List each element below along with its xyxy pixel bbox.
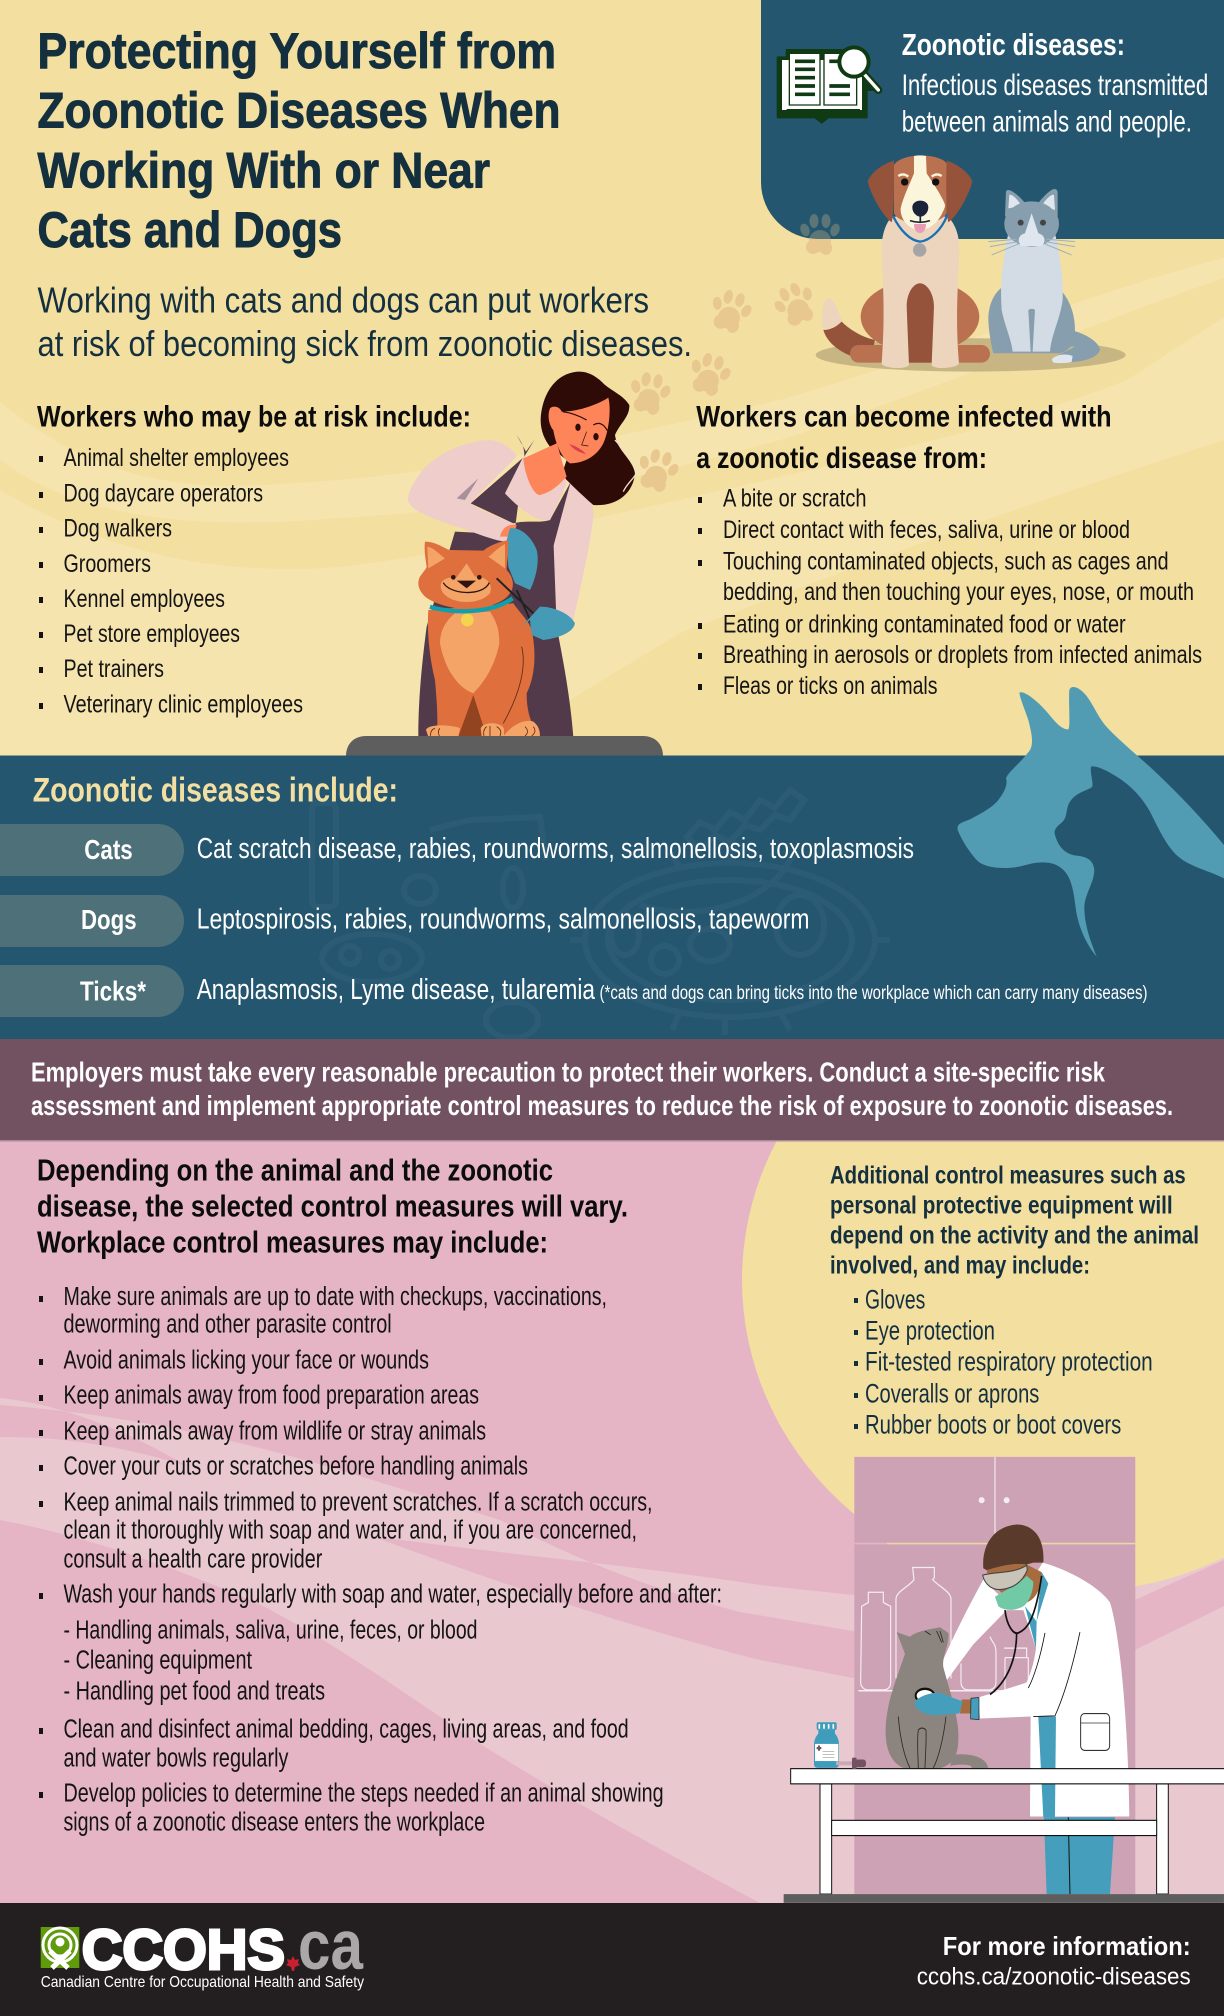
list: workplace control measures: Keep animal nails trimmed to prevent scratches. If a scratch occurs, <box>64 1489 652 1517</box>
list: infection routes: Direct contact with feces, saliva, urine or blood <box>723 516 1130 544</box>
list: protective equipment: Gloves <box>865 1284 925 1314</box>
heading: control measures: Workplace control measures may include: <box>37 1225 548 1260</box>
list: workers at risk <box>39 444 303 718</box>
cat on table <box>886 1627 988 1781</box>
title: Cats and Dogs <box>38 202 342 258</box>
heading: how workers become infected: a zoonotic disease from: <box>696 442 987 475</box>
footer <box>0 1903 1224 2016</box>
title <box>38 23 560 258</box>
list: workers at risk: Dog walkers <box>64 515 172 543</box>
list: workers at risk: Groomers <box>64 550 151 578</box>
heading: control measures: Depending on the animal and the zoonotic <box>37 1153 553 1188</box>
list: workplace control measures: - Handling pet food and treats <box>64 1677 325 1705</box>
row: cats: Cats <box>84 834 133 865</box>
dog <box>822 155 990 368</box>
list: workplace control measures: signs of a zoonotic disease enters the workplace <box>64 1809 485 1837</box>
list: workplace control measures: - Cleaning equipment <box>64 1646 252 1674</box>
subtitle <box>38 280 692 364</box>
dog being groomed <box>418 540 540 737</box>
heading: zoonotic diseases include: Zoonotic diseases include: <box>33 772 398 810</box>
logo: CCOHS.ca <box>41 1906 364 1991</box>
more information: For more information: <box>943 1931 1191 1961</box>
floor <box>784 1894 1224 1903</box>
subtitle: at risk of becoming sick from zoonotic diseases. <box>38 323 692 364</box>
row: cats <box>0 824 914 876</box>
row: dogs: Dogs <box>81 904 137 935</box>
subtitle: Working with cats and dogs can put workers <box>38 280 649 320</box>
heading: additional control measures: involved, and may include: <box>830 1251 1090 1279</box>
list: workplace control measures: Make sure animals are up to date with checkups, vaccinations, <box>64 1283 607 1311</box>
title: Protecting Yourself from <box>38 23 556 79</box>
list: infection routes: A bite or scratch <box>723 484 866 512</box>
row: dogs: Leptospirosis, rabies, roundworms, salmonellosis, tapeworm <box>197 904 809 936</box>
logo: CCOHS.ca: CCOHS <box>82 1918 285 1982</box>
list: workplace control measures: deworming and other parasite control <box>64 1311 392 1339</box>
heading: zoonotic diseases: Zoonotic diseases: <box>902 27 1125 62</box>
icon: book and magnifying glass <box>778 45 878 123</box>
list: workers at risk: Veterinary clinic employees <box>64 690 303 718</box>
title: Zoonotic Diseases When <box>38 82 560 138</box>
row: cats: Cat scratch disease, rabies, roundworms, salmonellosis, toxoplasmosis <box>197 833 914 865</box>
list: workplace control measures: Avoid animals licking your face or wounds <box>64 1346 429 1374</box>
panel: employer callout <box>0 1039 1224 1140</box>
list: workplace control measures: Develop policies to determine the steps needed if an animal showing <box>64 1780 664 1808</box>
panel: workers at risk <box>37 400 471 718</box>
heading: additional control measures <box>830 1161 1199 1279</box>
list: protective equipment: Rubber boots or boot covers <box>865 1409 1121 1439</box>
exam table <box>791 1769 1224 1894</box>
medicine bottle and dropper <box>814 1722 866 1769</box>
logo: CCOHS.ca: ca <box>298 1906 364 1984</box>
list: workplace control measures: Clean and disinfect animal bedding, cages, living areas, and food <box>64 1715 629 1743</box>
list: workers at risk: Pet store employees <box>64 620 240 648</box>
list: workers at risk: Kennel employees <box>64 585 225 613</box>
list: workplace control measures: - Handling animals, saliva, urine, feces, or blood <box>64 1616 478 1644</box>
list: protective equipment <box>854 1284 1153 1439</box>
grooming table <box>346 736 663 758</box>
gloved hand <box>915 1693 979 1720</box>
panel: pink control measures background <box>0 1140 1224 1903</box>
silhouette: dog and cat <box>958 687 1224 957</box>
heading: how workers become infected <box>696 400 1112 475</box>
list: workplace control measures: Cover your cuts or scratches before handling animals <box>64 1452 528 1480</box>
panel: zoonotic diseases definition <box>761 0 1224 239</box>
scissors and lower glove <box>497 578 575 640</box>
panel: additional control measures <box>830 1161 1199 1439</box>
cabinet <box>854 1457 1135 1894</box>
panel: zoonotic diseases include <box>0 756 1224 1039</box>
icon: maple leaf <box>286 1956 300 1971</box>
list: workplace control measures <box>39 1283 722 1837</box>
icon: logo square <box>41 1927 79 1968</box>
panel: yellow top background <box>0 0 1224 760</box>
list: protective equipment: Coveralls or aprons <box>865 1379 1039 1409</box>
logo: CCOHS.ca: Canadian Centre for Occupational Health and Safety <box>41 1974 364 1991</box>
decorative paw prints <box>625 200 845 496</box>
list: workers at risk: Pet trainers <box>64 655 164 683</box>
cat <box>988 189 1100 363</box>
list: workplace control measures: Keep animals away from food preparation areas <box>64 1381 479 1409</box>
list: workplace control measures: clean it thoroughly with soap and water and, if you are concerned, <box>64 1516 637 1544</box>
title: Working With or Near <box>38 142 490 198</box>
list: workplace control measures: consult a health care provider <box>64 1545 323 1573</box>
groomer <box>408 372 637 737</box>
more information <box>917 1931 1191 1991</box>
list: workers at risk: Dog daycare operators <box>64 480 263 508</box>
list: workplace control measures: Wash your hands regularly with soap and water, especially before and after: <box>64 1580 722 1608</box>
heading: workers at risk: Workers who may be at risk include: <box>37 400 471 434</box>
row: ticks: Anaplasmosis, Lyme disease, tularemia <box>197 974 596 1006</box>
list: infection routes: Fleas or ticks on animals <box>723 672 938 700</box>
list: infection routes <box>698 484 1202 700</box>
heading: control measures: disease, the selected control measures will vary. <box>37 1189 628 1224</box>
more information: ccohs.ca/zoonotic-diseases <box>917 1964 1191 1991</box>
panel: how workers become infected <box>696 400 1202 700</box>
list: protective equipment: Eye protection <box>865 1315 995 1345</box>
illustration: veterinarian examining cat <box>784 1457 1224 1903</box>
list: workers at risk: Animal shelter employees <box>64 444 289 472</box>
list: workplace control measures: Keep animals away from wildlife or stray animals <box>64 1417 486 1445</box>
upper glove <box>507 528 538 590</box>
definition text <box>902 69 1208 139</box>
heading: how workers become infected: Workers can become infected with <box>696 400 1112 434</box>
list: workplace control measures: and water bowls regularly <box>64 1745 289 1773</box>
heading: control measures <box>37 1153 628 1260</box>
illustration: dog and cat <box>816 155 1126 372</box>
row: ticks: Ticks* <box>80 976 146 1007</box>
row: dogs <box>0 895 810 947</box>
veterinarian <box>942 1525 1129 1894</box>
row: ticks <box>0 965 1148 1017</box>
decorative microbes <box>312 790 890 1038</box>
list: infection routes: Eating or drinking contaminated food or water <box>723 611 1126 639</box>
illustration: groomer with dog <box>408 372 637 737</box>
